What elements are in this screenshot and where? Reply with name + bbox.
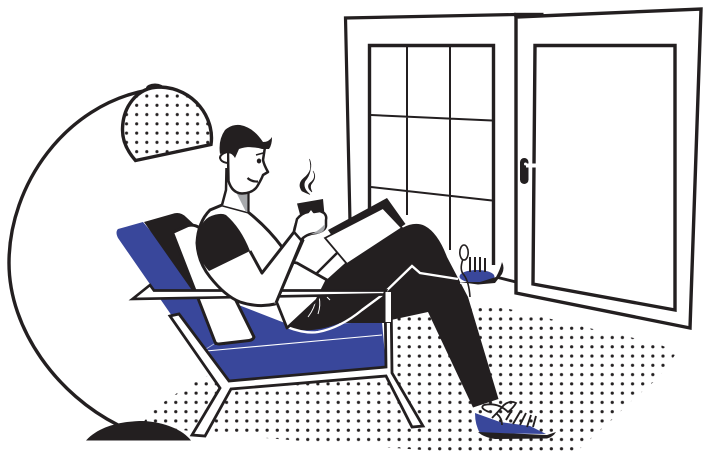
floor lamp bbox=[9, 84, 211, 440]
hand shadow bbox=[306, 224, 325, 235]
book cover bbox=[328, 198, 406, 262]
trousers bbox=[287, 224, 498, 408]
door top bar bbox=[514, 13, 544, 17]
lamp base bbox=[86, 421, 191, 440]
hand bbox=[294, 208, 326, 240]
hair bbox=[220, 125, 272, 158]
neck shadow bbox=[236, 192, 248, 212]
lamp shade bbox=[122, 87, 211, 160]
steam bbox=[300, 159, 315, 194]
door pane bbox=[533, 46, 675, 310]
door bbox=[514, 9, 701, 328]
door leaf bbox=[516, 9, 701, 328]
sill line bbox=[496, 277, 516, 282]
armrest bbox=[132, 285, 386, 299]
raised shoe bbox=[459, 245, 504, 297]
torso bbox=[197, 205, 303, 306]
lamp knob bbox=[146, 84, 164, 92]
book bbox=[316, 198, 406, 281]
lamp arc bbox=[9, 90, 148, 425]
smile bbox=[248, 178, 258, 182]
ear bbox=[220, 152, 227, 163]
chair frame bbox=[170, 294, 423, 436]
man bbox=[132, 125, 556, 439]
floor dot pattern bbox=[141, 305, 677, 452]
window muntins bbox=[371, 46, 492, 250]
book lines bbox=[316, 253, 347, 281]
neck bbox=[222, 160, 248, 212]
trouser seam bbox=[287, 266, 458, 332]
lower shoe bbox=[475, 402, 556, 439]
chair bbox=[116, 213, 423, 436]
headrest (black) bbox=[144, 213, 225, 345]
trouser folds bbox=[308, 297, 330, 317]
face bbox=[228, 145, 268, 194]
pillow bbox=[172, 225, 254, 344]
arm bbox=[250, 216, 323, 304]
book pages bbox=[325, 208, 402, 264]
window outer frame bbox=[346, 14, 516, 222]
eyebrow bbox=[256, 152, 265, 155]
window inner frame bbox=[370, 46, 494, 265]
chair cushion (blue) bbox=[116, 222, 386, 381]
seat crease bbox=[206, 335, 382, 351]
sleeve bbox=[197, 214, 250, 271]
coffee cup bbox=[297, 199, 324, 222]
shirt lower bbox=[262, 260, 327, 328]
eye bbox=[257, 158, 261, 164]
armrest post top bbox=[386, 292, 391, 322]
door handle bbox=[520, 158, 536, 184]
window bbox=[346, 14, 516, 282]
